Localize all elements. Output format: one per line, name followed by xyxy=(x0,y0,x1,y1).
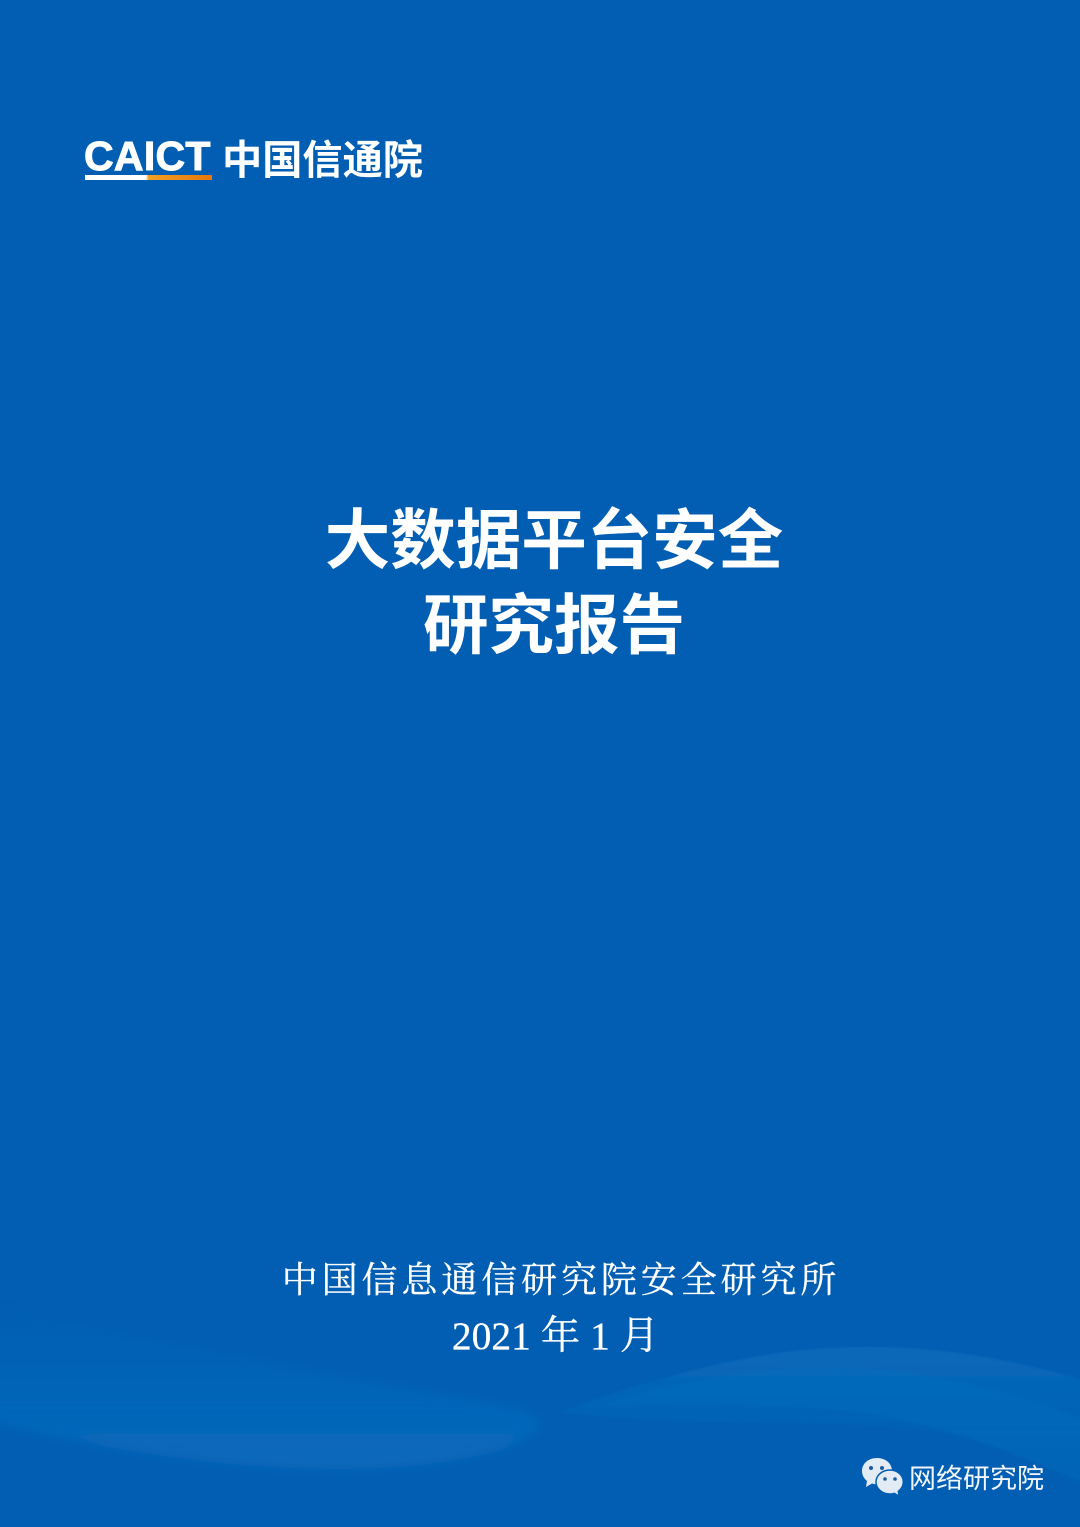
logo Chinese name: 中国信通院 xyxy=(222,138,423,183)
logo: CAICT 中国信通院 xyxy=(84,133,423,183)
logo wordmark: CAICT xyxy=(84,133,211,179)
issuing organisation: 中国信息通信研究院安全研究所 xyxy=(282,1260,840,1300)
icon: WeChat xyxy=(862,1458,903,1495)
background waves xyxy=(26,1347,1080,1469)
logo underline xyxy=(85,175,212,180)
title xyxy=(325,504,783,662)
title: 研究报告 xyxy=(423,589,685,662)
date: 2021 年 1 月 xyxy=(452,1314,659,1358)
title: 大数据平台安全 xyxy=(325,504,783,577)
WeChat account name: 网络研究院 xyxy=(909,1464,1044,1494)
